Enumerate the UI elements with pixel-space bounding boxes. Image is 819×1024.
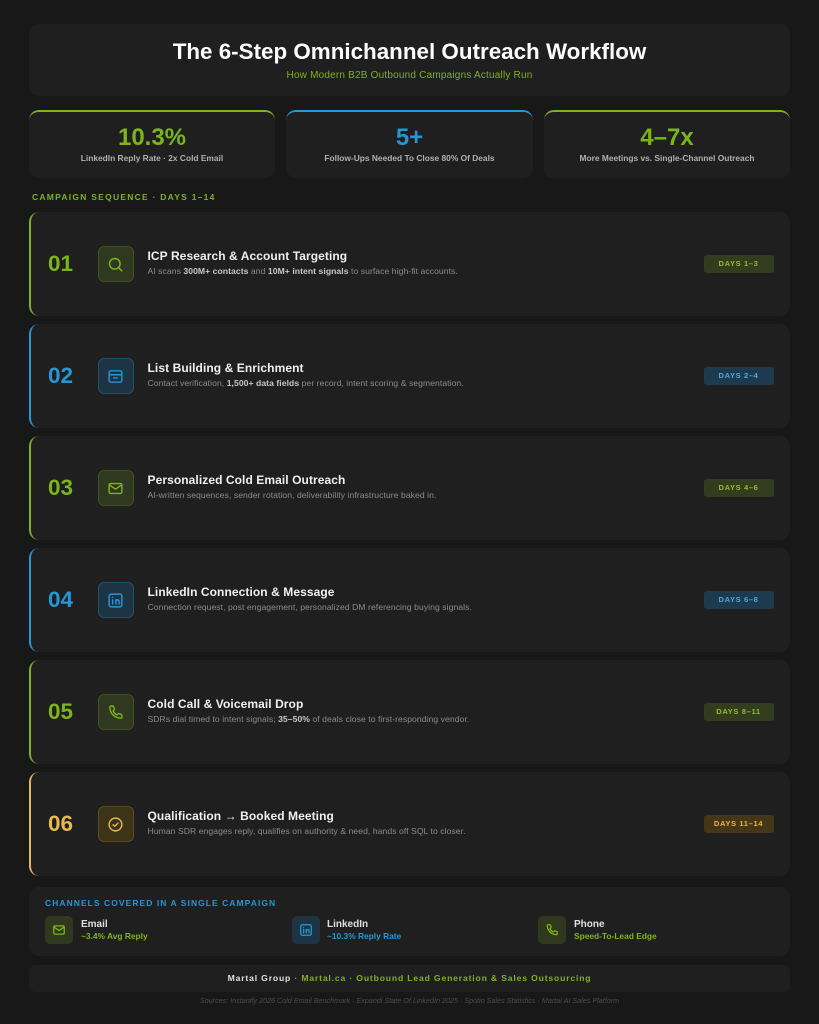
step description: AI scans 300M+ contacts and 10M+ intent signals to surface high-fit accounts. <box>148 266 458 276</box>
days badge: DAYS 1–3 <box>718 259 758 268</box>
icon: check circle <box>98 806 134 842</box>
icon: LinkedIn channel <box>292 916 320 944</box>
section heading: campaign sequence: CAMPAIGN SEQUENCE · DAYS 1–14 <box>32 192 216 202</box>
stat value: 10.3% <box>118 124 186 150</box>
stat label: LinkedIn Reply Rate · 2x Cold Email <box>81 153 223 163</box>
icon: email channel <box>45 916 73 944</box>
header panel <box>29 24 790 96</box>
icon: envelope <box>98 470 134 506</box>
days badge <box>704 815 774 833</box>
stat label: More Meetings vs. Single-Channel Outreach <box>580 153 754 163</box>
days badge <box>704 703 774 721</box>
step heading: Qualification → Booked Meeting <box>148 808 334 822</box>
step description: SDRs dial timed to intent signals; 35–50% of deals close to first-responding vendor. <box>148 714 469 724</box>
days badge: DAYS 2–4 <box>718 371 758 380</box>
subtitle: How Modern B2B Outbound Campaigns Actually Run <box>286 70 532 81</box>
step 05 panel <box>29 660 790 764</box>
channel stat: phone: Speed-To-Lead Edge <box>574 930 657 940</box>
step heading: List Building & Enrichment <box>148 360 304 374</box>
sources line: Sources: Instantly 2026 Cold Email Benchmark · Expandi State Of LinkedIn 2025 · Spotio Sales Statistics · Martal AI Sales Platform <box>200 996 619 1004</box>
step number: 05 <box>48 699 73 724</box>
stat value: 5+ <box>396 124 423 150</box>
step number: 04 <box>48 587 73 612</box>
stat value: 4–7x <box>640 124 694 150</box>
step number: 01 <box>48 251 73 276</box>
stat label: Follow-Ups Needed To Close 80% Of Deals <box>324 153 495 163</box>
footer text: Martal Group · Martal.ca · Outbound Lead Generation & Sales Outsourcing <box>228 973 591 983</box>
step description: AI-written sequences, sender rotation, deliverability infrastructure baked in. <box>148 490 436 500</box>
stat card: more meetings <box>544 110 790 178</box>
days badge: DAYS 8–11 <box>716 707 761 716</box>
step number: 02 <box>48 363 73 388</box>
step 01 panel <box>29 212 790 316</box>
days badge <box>704 255 774 273</box>
channel name: email: Email <box>81 919 108 930</box>
stat card: follow-ups <box>286 110 533 178</box>
step heading: LinkedIn Connection & Message <box>148 584 335 598</box>
channel name: LinkedIn: LinkedIn <box>327 919 368 930</box>
step 03 panel <box>29 436 790 540</box>
days badge <box>704 479 774 497</box>
step number: 03 <box>48 475 73 500</box>
step heading: Cold Call & Voicemail Drop <box>148 696 303 710</box>
channels heading: CHANNELS COVERED IN A SINGLE CAMPAIGN <box>45 898 276 908</box>
days badge <box>704 367 774 385</box>
icon: search <box>98 246 134 282</box>
footer brand bar <box>29 965 790 992</box>
days badge: DAYS 4–6 <box>718 483 758 492</box>
step 04 panel <box>29 548 790 652</box>
icon: phone channel <box>538 916 566 944</box>
icon: list card <box>98 358 134 394</box>
days badge <box>704 591 774 609</box>
icon: phone <box>98 694 134 730</box>
step 02 panel <box>29 324 790 428</box>
step heading: Personalized Cold Email Outreach <box>148 472 345 486</box>
panel: channels covered <box>29 887 790 956</box>
days badge: DAYS 11–14 <box>714 819 763 828</box>
days badge: DAYS 6–8 <box>718 595 758 604</box>
step description: Connection request, post engagement, personalized DM referencing buying signals. <box>148 602 472 612</box>
step 06 panel <box>29 772 790 876</box>
channel stat: LinkedIn: ~10.3% Reply Rate <box>327 930 401 940</box>
channel stat: email: ~3.4% Avg Reply <box>81 930 148 940</box>
channel name: phone: Phone <box>574 919 605 930</box>
step heading: ICP Research & Account Targeting <box>148 248 347 262</box>
icon: LinkedIn <box>98 582 134 618</box>
stat card: LinkedIn reply rate <box>29 110 275 178</box>
step number: 06 <box>48 811 73 836</box>
title: The 6-Step Omnichannel Outreach Workflow <box>173 39 646 64</box>
step description: Contact verification, 1,500+ data fields per record, intent scoring & segmentation. <box>148 378 464 388</box>
step description: Human SDR engages reply, qualifies on authority & need, hands off SQL to closer. <box>148 826 466 836</box>
